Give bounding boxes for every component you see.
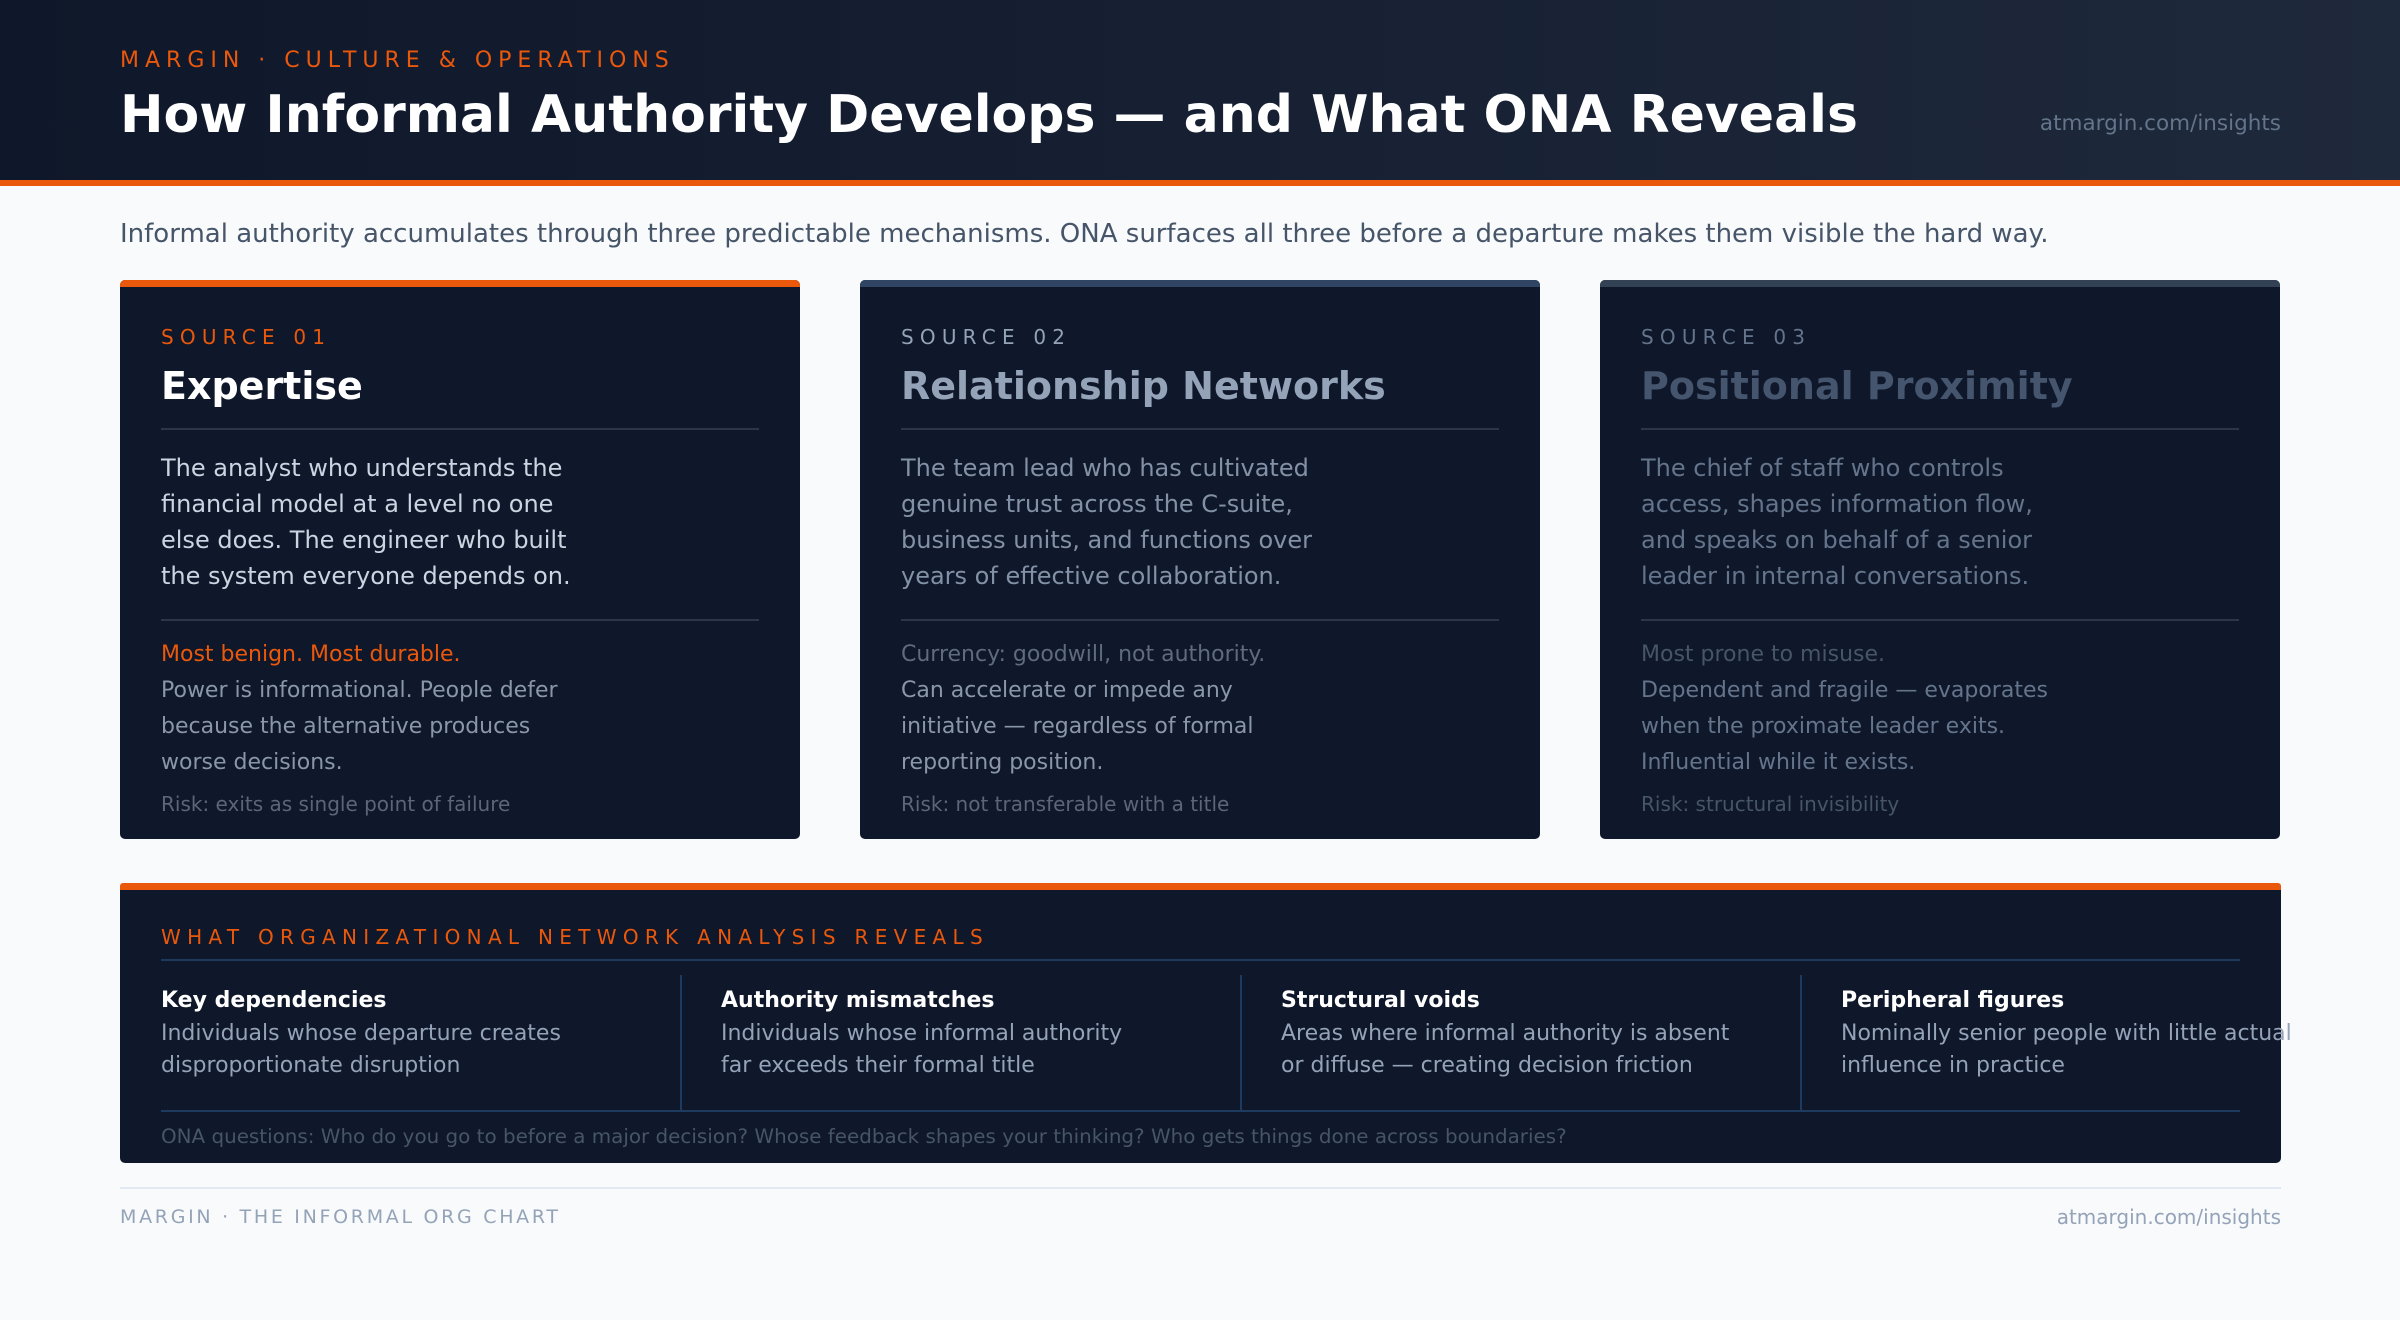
header url: atmargin.com/insights <box>2040 111 2281 136</box>
body text: access, shapes information flow, <box>1641 490 2033 518</box>
risk: Risk: structural invisibility <box>1641 792 1899 816</box>
notes: reporting position. <box>901 750 1103 775</box>
column: authority mismatches: Authority mismatches <box>721 988 994 1013</box>
notes: worse decisions. <box>161 750 343 775</box>
body text: business units, and functions over <box>901 526 1312 554</box>
column: key dependencies: Key dependencies <box>161 988 387 1013</box>
panel: card positional proximity <box>1600 280 2280 839</box>
label: source 03: SOURCE 03 <box>1641 325 1811 349</box>
body text: the system everyone depends on. <box>161 562 571 590</box>
panel: ONA reveals <box>120 883 2281 1163</box>
body text <box>900 454 1312 590</box>
notes: Most prone to misuse. <box>1641 642 1885 667</box>
notes: Most benign. Most durable. <box>161 642 461 667</box>
column: structural voids: or diffuse — creating decision friction <box>1281 1053 1693 1078</box>
notes: when the proximate leader exits. <box>1641 714 2005 739</box>
heading: relationship networks: Relationship Networks <box>901 364 1386 408</box>
header band <box>0 0 2400 180</box>
notes: Currency: goodwill, not authority. <box>901 642 1265 667</box>
title: How Informal Authority Develops — and What ONA Reveals <box>120 85 1858 145</box>
notes: Power is informational. People defer <box>161 678 558 703</box>
risk: Risk: exits as single point of failure <box>161 792 510 816</box>
notes: Influential while it exists. <box>1641 750 1915 775</box>
body text: leader in internal conversations. <box>1641 562 2029 590</box>
body text: else does. The engineer who built <box>161 526 567 554</box>
footer right: atmargin.com/insights <box>2057 1205 2281 1229</box>
notes: Can accelerate or impede any <box>901 678 1233 703</box>
kicker: MARGIN · CULTURE & OPERATIONS <box>120 48 675 73</box>
label: source 02: SOURCE 02 <box>901 325 1071 349</box>
label: source 01: SOURCE 01 <box>161 325 331 349</box>
notes <box>1641 642 2048 775</box>
ONA questions: ONA questions: Who do you go to before a major decision? Whose feedback shapes your thinking? Who gets things done across boundaries? <box>161 1125 1567 1148</box>
column: peripheral figures <box>1841 988 2292 1078</box>
column: key dependencies: Individuals whose departure creates <box>161 1021 561 1046</box>
column: peripheral figures: Nominally senior people with little actual <box>1841 1021 2292 1046</box>
notes <box>901 642 1265 775</box>
notes <box>161 642 558 775</box>
body text: The analyst who understands the <box>161 454 562 482</box>
section heading: WHAT ORGANIZATIONAL NETWORK ANALYSIS REVEALS <box>161 925 989 949</box>
body text: financial model at a level no one <box>161 490 553 518</box>
body text: The team lead who has cultivated <box>901 454 1309 482</box>
panel: card relationship networks <box>860 280 1540 839</box>
heading: expertise: Expertise <box>161 364 363 408</box>
notes: initiative — regardless of formal <box>901 714 1253 739</box>
column: structural voids <box>1281 988 1729 1078</box>
subtitle: Informal authority accumulates through three predictable mechanisms. ONA surfaces all three before a departure makes them visible the hard way. <box>120 219 2048 249</box>
column: authority mismatches: far exceeds their formal title <box>721 1053 1035 1078</box>
column: authority mismatches: Individuals whose informal authority <box>721 1021 1122 1046</box>
column: peripheral figures: influence in practice <box>1841 1053 2065 1078</box>
body text: The chief of staff who controls <box>1641 454 2004 482</box>
heading: positional proximity: Positional Proximity <box>1641 364 2073 408</box>
footer left: MARGIN · THE INFORMAL ORG CHART <box>120 1206 561 1228</box>
body text: genuine trust across the C-suite, <box>901 490 1293 518</box>
body text <box>160 454 571 590</box>
notes: because the alternative produces <box>161 714 530 739</box>
column: structural voids: Structural voids <box>1281 988 1480 1013</box>
notes: Dependent and fragile — evaporates <box>1641 678 2048 703</box>
body text: years of effective collaboration. <box>901 562 1281 590</box>
panel: card expertise <box>120 280 800 839</box>
body text: and speaks on behalf of a senior <box>1641 526 2032 554</box>
column: key dependencies <box>161 988 561 1078</box>
risk: Risk: not transferable with a title <box>901 792 1229 816</box>
column: key dependencies: disproportionate disruption <box>161 1053 460 1078</box>
body text <box>1640 454 2033 590</box>
orange rule <box>0 180 2400 186</box>
column: structural voids: Areas where informal authority is absent <box>1281 1021 1729 1046</box>
column: authority mismatches <box>721 988 1122 1078</box>
column: peripheral figures: Peripheral figures <box>1841 988 2064 1013</box>
